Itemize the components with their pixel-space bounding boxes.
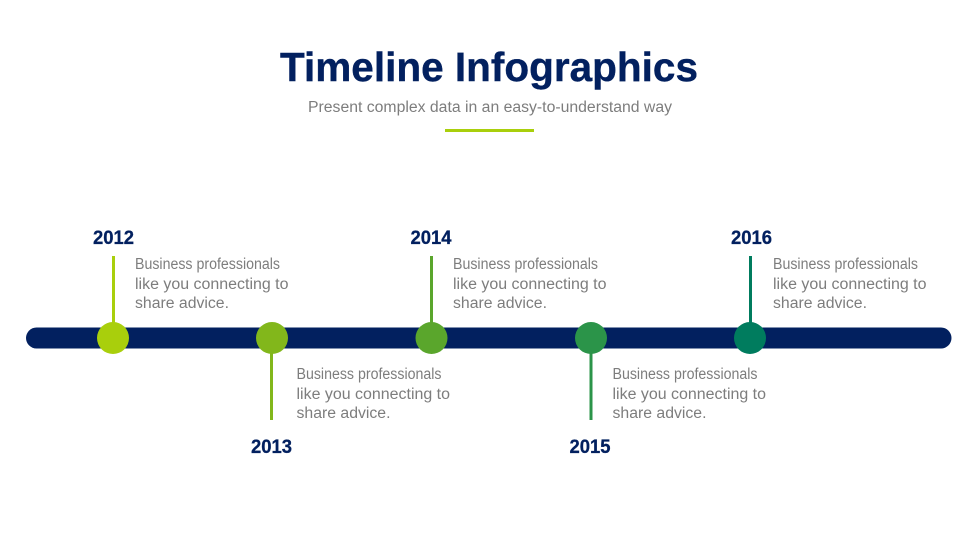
year: 2016 bbox=[731, 228, 772, 249]
description: like you connecting to bbox=[296, 386, 450, 403]
description: share advice. bbox=[773, 295, 867, 312]
description: like you connecting to bbox=[773, 276, 926, 293]
marker bbox=[734, 322, 766, 354]
description: Business professionals bbox=[612, 366, 758, 383]
description: Business professionals bbox=[135, 256, 280, 273]
marker bbox=[97, 322, 129, 354]
description: like you connecting to bbox=[135, 276, 288, 293]
timeline bar bbox=[26, 328, 952, 348]
description: Business professionals bbox=[773, 256, 918, 273]
milestone 2012 bbox=[93, 228, 288, 354]
header bbox=[280, 44, 698, 132]
milestone 2013 bbox=[251, 322, 450, 458]
title underline bbox=[445, 129, 534, 132]
description: Business professionals bbox=[296, 366, 442, 383]
connector bbox=[749, 256, 752, 326]
connector bbox=[270, 350, 273, 420]
subtitle: Present complex data in an easy-to-understand way bbox=[308, 99, 672, 116]
milestone 2016 bbox=[731, 228, 926, 354]
marker bbox=[416, 322, 448, 354]
description: Business professionals bbox=[453, 256, 598, 273]
description: like you connecting to bbox=[453, 276, 606, 293]
milestone 2015 bbox=[570, 322, 766, 458]
title: Timeline Infographics bbox=[280, 44, 698, 90]
year: 2012 bbox=[93, 228, 134, 249]
description: like you connecting to bbox=[612, 386, 766, 403]
year: 2013 bbox=[251, 437, 292, 458]
marker bbox=[575, 322, 607, 354]
description: share advice. bbox=[612, 405, 706, 422]
year: 2015 bbox=[570, 437, 611, 458]
milestone 2014 bbox=[410, 228, 606, 354]
connector bbox=[112, 256, 115, 326]
description: share advice. bbox=[453, 295, 547, 312]
description: share advice. bbox=[135, 295, 229, 312]
connector bbox=[590, 350, 592, 420]
connector bbox=[430, 256, 433, 326]
description: share advice. bbox=[296, 405, 390, 422]
year: 2014 bbox=[410, 228, 452, 249]
marker bbox=[256, 322, 288, 354]
